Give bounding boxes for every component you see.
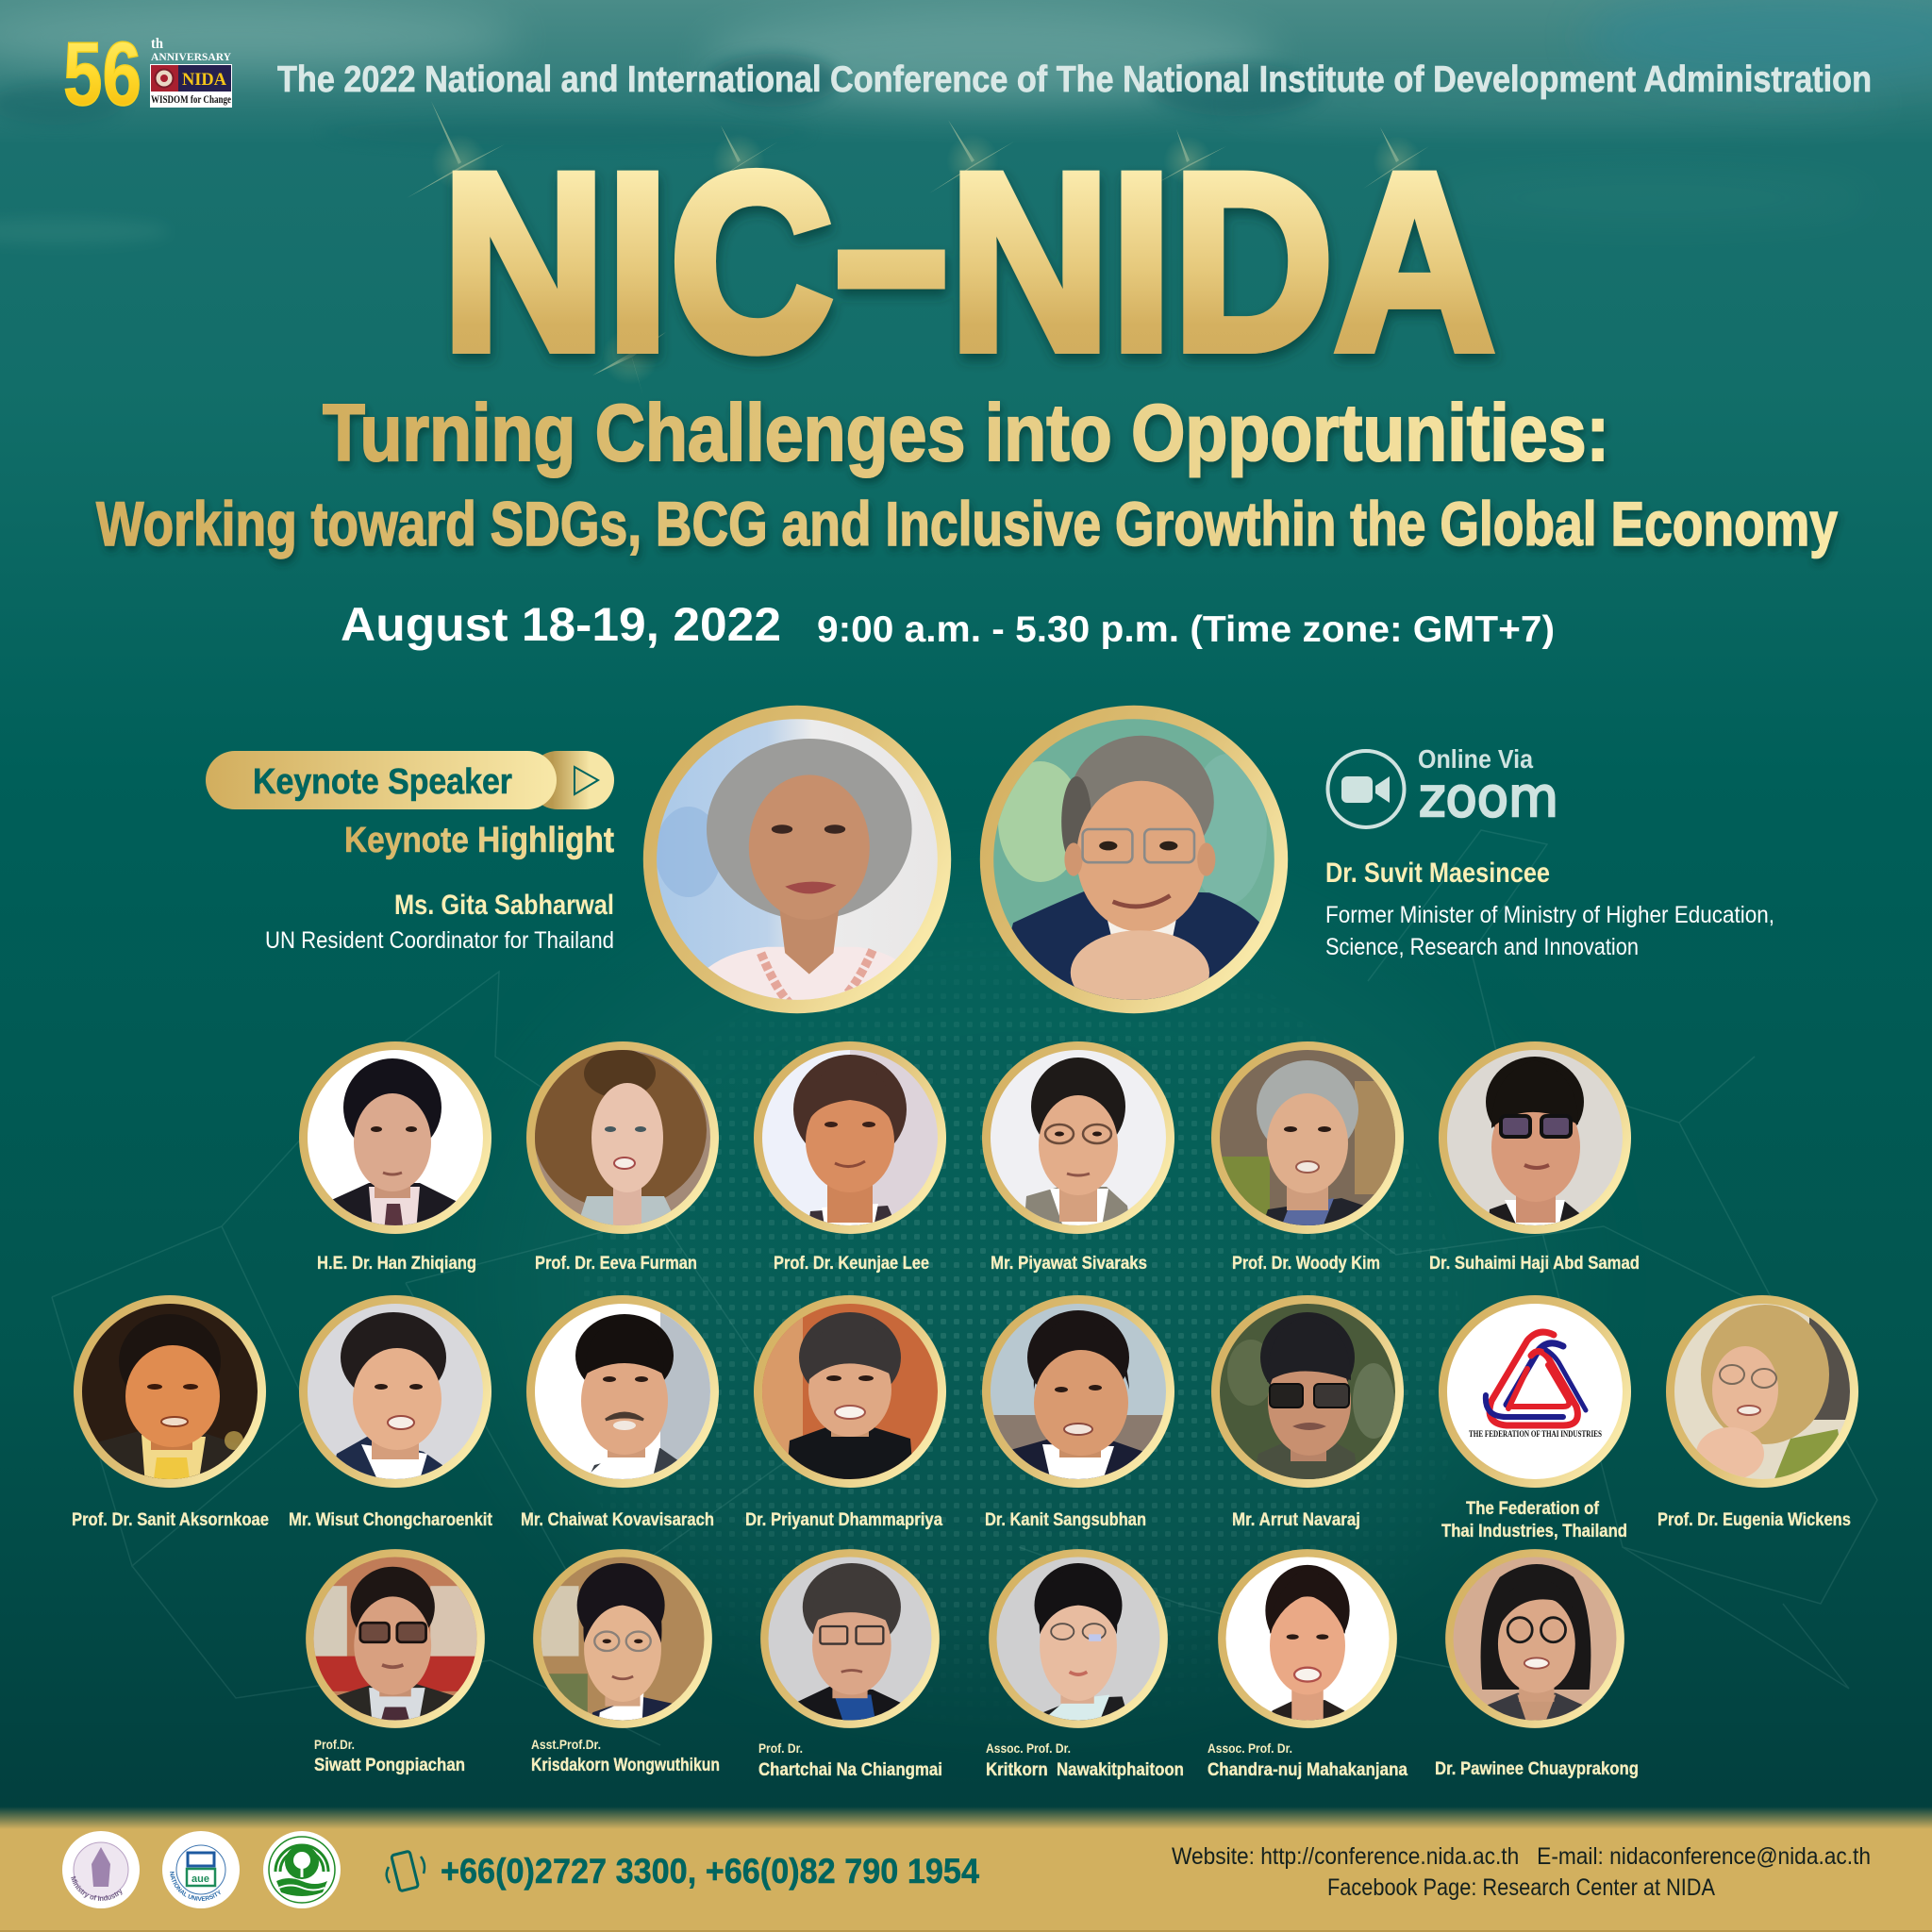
name: Prof. Dr. Eugenia Wickens	[1657, 1510, 1851, 1530]
keynote speaker pill	[206, 751, 614, 809]
logo: Federation of Thai Industries	[1439, 1295, 1631, 1488]
subtitle line 1: Turning Challenges into Opportunities:	[323, 389, 1609, 478]
facebook page: Facebook Page: Research Center at NIDA	[1327, 1874, 1715, 1901]
background: clouds	[0, 0, 1932, 244]
portrait	[1211, 1041, 1404, 1234]
name: Dr. Priyanut Dhammapriya	[745, 1510, 942, 1530]
speaker: Dr. Pawinee Chuayprakong	[1435, 1549, 1639, 1779]
name: Kritkorn Nawakitphaitoon	[986, 1760, 1184, 1780]
portrait	[982, 1041, 1174, 1234]
NIDA badge	[150, 64, 232, 108]
keynote name: Gita Sabharwal: Ms. Gita Sabharwal	[394, 890, 614, 921]
phone numbers: +66(0)2727 3300, +66(0)82 790 1954	[441, 1852, 979, 1890]
keynote name: Suvit Maesincee: Dr. Suvit Maesincee	[1325, 858, 1550, 889]
name: Mr. Wisut Chongcharoenkit	[289, 1510, 493, 1530]
portrait	[1439, 1041, 1631, 1234]
portrait	[1445, 1549, 1624, 1728]
speaker: The Federation of Thai Industries	[1439, 1295, 1631, 1541]
title: Prof.Dr.	[314, 1737, 355, 1752]
name: Prof. Dr. Woody Kim	[1232, 1254, 1380, 1274]
portrait	[1211, 1295, 1404, 1488]
number 56: 56	[63, 24, 142, 125]
speaker: Chandra-nuj Mahakanjana	[1208, 1549, 1407, 1780]
logo: Pusan National University	[162, 1831, 240, 1908]
portrait	[74, 1295, 266, 1488]
superscript th: th	[151, 36, 163, 52]
name: H.E. Dr. Han Zhiqiang	[317, 1254, 476, 1274]
title: NIC-NIDA: -	[830, 106, 953, 389]
speaker: Mr. Arrut Navaraj	[1211, 1295, 1404, 1530]
logo: 56th anniversary NIDA	[63, 24, 232, 125]
portrait	[754, 1295, 946, 1488]
portrait	[526, 1041, 719, 1234]
name: Dr. Pawinee Chuayprakong	[1435, 1759, 1639, 1779]
logo: Federation of Thai Industries: THE FEDERATION OF THAI INDUSTRIES	[1469, 1429, 1602, 1439]
keynote role: Suvit Maesincee: Science, Research and Innovation	[1325, 934, 1639, 960]
portrait	[989, 1549, 1168, 1728]
keynote speaker pill: Keynote Speaker	[253, 762, 512, 802]
speaker: Kritkorn Nawakitphaitoon	[986, 1549, 1184, 1780]
speaker: Prof. Dr. Eugenia Wickens	[1657, 1295, 1858, 1530]
background: dotted globe	[597, 998, 1443, 1636]
speaker: Mr. Piyawat Sivaraks	[982, 1041, 1174, 1274]
speaker: Dr. Suhaimi Haji Abd Samad	[1429, 1041, 1640, 1274]
keynote role: Suvit Maesincee: Former Minister of Ministry of Higher Education,	[1325, 902, 1774, 928]
keynote role: Suvit Maesincee	[1325, 902, 1774, 960]
website and email: Website: http://conference.nida.ac.th E-mail: nidaconference@nida.ac.th	[1172, 1843, 1871, 1870]
portrait	[1666, 1295, 1858, 1488]
portrait	[533, 1549, 712, 1728]
date: August 18-19, 2022	[341, 598, 781, 651]
title: NIC-NIDA	[441, 106, 1495, 403]
logo: Ministry of Industry: Ministry of Industry	[71, 1875, 123, 1901]
decorative sparkles behind title	[407, 101, 1429, 396]
speaker: Prof. Dr. Sanit Aksornkoae	[72, 1295, 269, 1530]
speaker: H.E. Dr. Han Zhiqiang	[299, 1041, 491, 1274]
name: Thai Industries, Thailand	[1441, 1522, 1627, 1541]
name: Prof. Dr. Sanit Aksornkoae	[72, 1510, 269, 1530]
speaker: Prof. Dr. Woody Kim	[1211, 1041, 1404, 1274]
portrait: Suvit Maesincee	[980, 706, 1288, 1015]
NIDA badge: NIDA	[182, 70, 226, 90]
name: Mr. Arrut Navaraj	[1232, 1510, 1360, 1530]
time: 9:00 a.m. - 5.30 p.m. (Time zone: GMT+7)	[817, 609, 1555, 650]
speaker: Chartchai Na Chiangmai	[758, 1549, 942, 1780]
portrait	[299, 1295, 491, 1488]
name	[1441, 1499, 1627, 1541]
logo: Ministry of Industry	[62, 1831, 140, 1908]
keynote role: Gita Sabharwal: UN Resident Coordinator for Thailand	[265, 927, 614, 954]
background: globe glow	[491, 887, 1547, 1679]
speaker: Krisdakorn Wongwuthikun	[531, 1549, 720, 1775]
portrait	[306, 1549, 485, 1728]
name: Mr. Piyawat Sivaraks	[991, 1254, 1147, 1274]
name: Prof. Dr. Eeva Furman	[535, 1254, 697, 1274]
name: Mr. Chaiwat Kovavisarach	[521, 1510, 714, 1530]
name: Dr. Kanit Sangsubhan	[985, 1510, 1146, 1530]
portrait	[760, 1549, 940, 1728]
logo: green tree emblem	[263, 1831, 341, 1908]
title: Prof. Dr.	[758, 1740, 803, 1756]
online via zoom block	[1328, 744, 1558, 829]
portrait: Gita Sabharwal	[643, 706, 951, 1013]
speaker: Mr. Wisut Chongcharoenkit	[289, 1295, 493, 1530]
NIDA badge: WISDOM for Change	[151, 94, 231, 106]
online via text: Online Via	[1418, 744, 1533, 774]
name: Prof. Dr. Keunjae Lee	[774, 1254, 929, 1274]
name: Chandra-nuj Mahakanjana	[1208, 1760, 1407, 1780]
title: Asst.Prof.Dr.	[531, 1737, 601, 1752]
speaker: Dr. Kanit Sangsubhan	[982, 1295, 1174, 1530]
name: Chartchai Na Chiangmai	[758, 1760, 942, 1780]
icon: zoom camera	[1328, 751, 1404, 827]
speaker: Mr. Chaiwat Kovavisarach	[521, 1295, 719, 1530]
speaker: Dr. Priyanut Dhammapriya	[745, 1295, 946, 1530]
portrait	[754, 1041, 946, 1234]
name: Krisdakorn Wongwuthikun	[531, 1756, 720, 1775]
portrait	[526, 1295, 719, 1488]
speaker: Siwatt Pongpiachan	[306, 1549, 485, 1775]
portrait	[982, 1295, 1174, 1488]
title: NIC-NIDA: NIC	[441, 120, 834, 403]
name: Dr. Suhaimi Haji Abd Samad	[1429, 1254, 1640, 1274]
speaker: Prof. Dr. Eeva Furman	[526, 1041, 719, 1274]
title: Assoc. Prof. Dr.	[986, 1740, 1071, 1756]
anniversary text: ANNIVERSARY	[151, 50, 231, 63]
icon: vibrating phone	[387, 1851, 425, 1891]
logo: Pusan National University: aue	[192, 1874, 209, 1885]
zoom wordmark: zoom	[1419, 765, 1558, 829]
title: Assoc. Prof. Dr.	[1208, 1740, 1292, 1756]
title: NIC-NIDA: NIDA	[949, 120, 1495, 403]
keynote highlight heading: Keynote Highlight	[344, 821, 614, 860]
logo: Pusan National University: NATIONAL UNIVERSITY	[170, 1872, 221, 1901]
footer band	[0, 1807, 1932, 1932]
background: network lines	[52, 830, 1877, 1745]
name: The Federation of	[1466, 1499, 1600, 1519]
portrait	[299, 1041, 491, 1234]
name: Siwatt Pongpiachan	[314, 1756, 465, 1775]
portrait	[1218, 1549, 1397, 1728]
speaker: Prof. Dr. Keunjae Lee	[754, 1041, 946, 1274]
